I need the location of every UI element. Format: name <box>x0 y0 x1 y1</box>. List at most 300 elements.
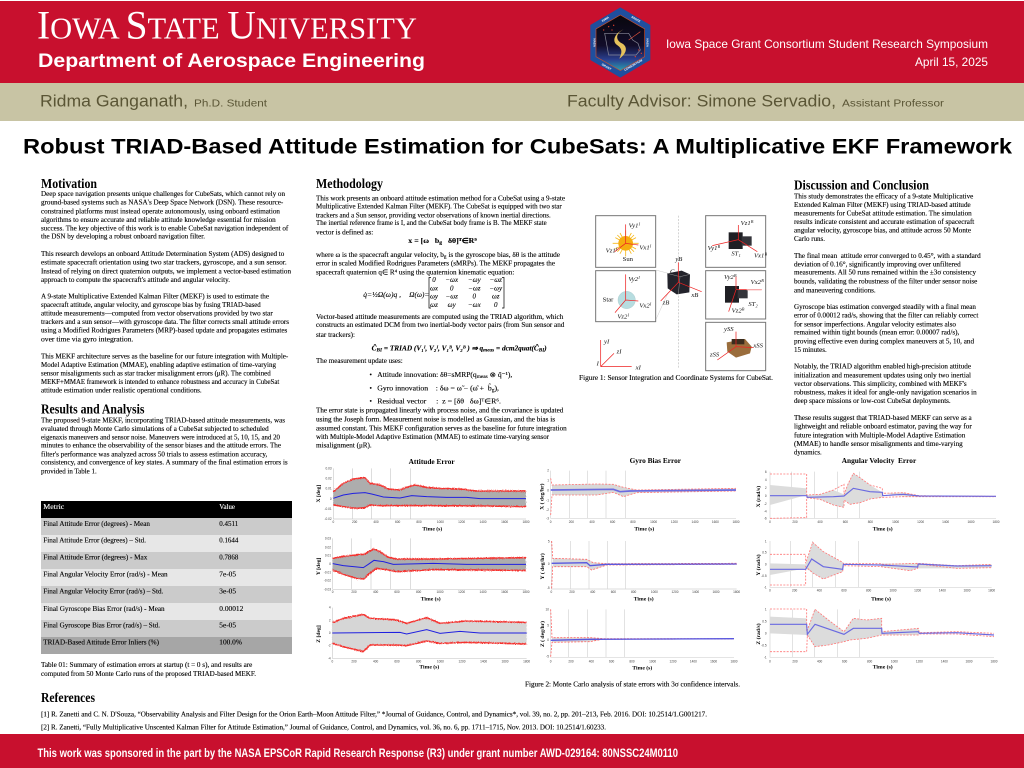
chart: angular velocity X: Time (s) <box>873 526 893 533</box>
results body text: minutes to enhance the observability of the sensor biases and the attitude errors. The <box>41 442 281 450</box>
chart: gyro bias Z: Time (s) <box>632 665 652 672</box>
chart: attitude error X: 1400 <box>479 520 487 524</box>
results summary table: Final Attitude Error (degrees) – Std. <box>43 537 146 545</box>
chart: angular velocity Y: Y (rad/s) <box>755 554 762 576</box>
results summary table: 0.7868 <box>219 554 239 562</box>
symposium date: April 15, 2025 <box>915 55 988 69</box>
panel: star frame: Vz2ᴵ <box>617 313 629 320</box>
results body text: consistency, and convergence of key states. A summary of the final estimation errors is <box>41 459 288 467</box>
state vector explanation: where ω is the spacecraft angular velocity, b <box>316 251 440 259</box>
chart: gyro bias Z: 0 <box>547 638 549 642</box>
chart: angular velocity Y: -0.5 <box>761 574 767 578</box>
icon: cubesat body frame: zB <box>662 299 669 306</box>
chart: angular velocity X: -4 <box>764 509 767 513</box>
chart: angular velocity X: -6 <box>764 517 767 521</box>
chart: attitude error Y: 1800 <box>522 590 530 594</box>
chart: gyro bias Y: Y ( deg/hr) <box>539 553 546 579</box>
chart: angular velocity Z: -0.5 <box>761 644 767 648</box>
chart: gyro bias Z: 1600 <box>710 659 717 663</box>
motivation body text: the DSN by developing a robust onboard navigation filter. <box>41 233 205 241</box>
motivation body text: sensor misalignments such as star tracker misalignment errors (μR). The combined <box>41 369 271 377</box>
chart title: Angular Velocity Error <box>842 456 917 465</box>
chart: attitude error X: 1200 <box>458 520 465 524</box>
motivation body text: attitude measurements—computed from vector observations provided by two star <box>41 309 273 317</box>
motivation body text: estimate spacecraft orientation using two star trackers, gyroscope, and a sun sensor. <box>41 259 287 267</box>
sponsorship acknowledgement: This work was sponsored in the part by the NASA EPSCoR Rapid Research Response (R3) under grant number AWD-029164: 80NSSC24M0110 <box>38 748 678 760</box>
icon: consortium hexagon logo: SPACE <box>630 15 641 23</box>
chart: attitude error X: 1600 <box>501 520 508 524</box>
chart: gyro bias Z: 1000 <box>649 659 656 663</box>
chart: angular velocity Z: -1 <box>764 656 767 660</box>
chart: attitude error Y: 0.01 <box>325 554 331 558</box>
chart: gyro bias Z: 1800 <box>730 659 738 663</box>
discussion body text: Extended Kalman Filter (MEKF) using TRIAD-based attitude <box>794 201 971 209</box>
chart: angular velocity Z: 600 <box>842 659 848 663</box>
chart: gyro bias X: 1 <box>547 479 549 483</box>
discussion body text: The final mean attitude error converged to 0.45°, with a standard <box>794 252 981 260</box>
motivation body text: Instead of relying on direct quaternion outputs, we implement a vector-based estimation <box>41 267 292 275</box>
motivation body text: MEKF+MMAE framework is intended to enhance robustness and accuracy in CubeSat <box>41 378 279 386</box>
results summary table: TRIAD-Based Attitude Error Inliers (%) <box>43 638 160 646</box>
measurement update intro: The measurement update uses: <box>316 357 403 365</box>
heading: motivation: Motivation <box>41 177 97 192</box>
error state paragraph: using the Joseph form. Measurement noise is modelled as Gaussian, and the bias is <box>316 415 555 423</box>
chart: gyro bias X: 0 <box>547 489 549 493</box>
equation: TRIAD: Ĉ <box>372 344 376 352</box>
icon: cubesat body frame: xB <box>690 292 698 299</box>
panel: sun sensor <box>706 322 766 371</box>
panel: sun frame: Vx1ᴵ <box>639 244 652 251</box>
header banner <box>0 1 1024 83</box>
discussion body text: deep space missions or low-cost CubeSat deployments. <box>794 397 951 405</box>
discussion body text: results indicate consistent and accurate estimation of spacecraft <box>794 218 974 226</box>
chart: angular velocity Z: 0 <box>769 659 771 663</box>
chart: attitude error Y: 0.02 <box>325 545 331 549</box>
chart: angular velocity X: 600 <box>843 520 848 524</box>
equation: quaternion kinematics: ωz <box>492 293 500 301</box>
chart: attitude error X: 0.03 <box>326 467 332 471</box>
measurement update bullets: • <box>370 384 372 392</box>
discussion body text: remained within tight bounds (mean error: 0.00007 rad/s), <box>794 329 960 337</box>
measurement update bullets <box>370 371 513 406</box>
chart: angular velocity X: 2 <box>765 486 767 490</box>
university wordmark: IOWA STATE UNIVERSITY <box>37 2 417 48</box>
discussion body text: and maneuvering conditions. <box>794 286 876 294</box>
discussion body text: These results suggest that TRIAD-based MEKF can serve as a <box>794 414 973 422</box>
discussion body text: robustness, makes it ideal for angle-only navigation scenarios in <box>794 388 977 396</box>
chart: attitude error Z: 4 <box>329 606 331 610</box>
chart: attitude error Z: 1800 <box>523 659 530 663</box>
discussion body text: measurements. All 50 runs remained within the ±3σ consistency <box>794 269 976 277</box>
results summary table: Final Attitude Error (degrees) - Max <box>43 554 148 562</box>
chart: attitude error Z: 0 <box>329 631 331 635</box>
motivation body text: using a Modified Rodrigues Parameters (MRP)-based update and propagates estimates <box>41 327 288 335</box>
equation: quaternion kinematics: 0 <box>473 293 477 301</box>
chart: gyro bias Z: 1200 <box>669 659 677 663</box>
chart: angular velocity Y: 1600 <box>963 589 971 593</box>
results summary table: 0.4511 <box>219 520 239 528</box>
results body text: evaluated through Monte Carlo simulations of a CubeSat subjected to scheduled <box>41 425 269 433</box>
chart: attitude error Y: 0 <box>329 562 331 566</box>
chart: angular velocity Y: 0.5 <box>762 551 767 555</box>
chart: angular velocity X: 0 <box>765 494 767 498</box>
panel: methodology <box>316 177 567 450</box>
chart: gyro bias Z: 10 <box>545 607 549 611</box>
chart: gyro bias X: 1200 <box>671 520 678 524</box>
panel: star tracker 2 <box>706 271 766 319</box>
chart: gyro bias Y: 1400 <box>692 590 699 594</box>
icon: cubesat body frame: C <box>670 268 675 275</box>
icon: cubesat body frame <box>661 256 702 306</box>
equation: quaternion kinematics: 0 <box>450 284 454 292</box>
chart: angular velocity Y: 0 <box>765 563 767 567</box>
chart: gyro bias X: 1800 <box>732 520 740 524</box>
chart: attitude error X: -0.02 <box>324 517 332 521</box>
equation: quaternion kinematics: q̇=½Ω(ω)q , <box>363 291 401 299</box>
chart: angular velocity X: 1200 <box>917 520 924 524</box>
icon: consortium hexagon logo: NASA <box>593 38 597 48</box>
chart: attitude error X: 0.02 <box>326 477 332 481</box>
state vector explanation: error in scaled Modified Rodrigues Parameters (sMRPs). The MEKF propagates the <box>316 260 555 268</box>
chart: gyro bias X: -2 <box>546 508 549 512</box>
motivation body text: This MEKF architecture serves as the baseline for our future integration with Multiple- <box>41 353 289 361</box>
discussion body text: future integration with Multiple-Model Adaptive Estimation <box>794 432 966 440</box>
chart: attitude error Y: Y [deg] <box>316 557 322 575</box>
chart: angular velocity Y: 200 <box>792 589 798 593</box>
panel: discussion and conclusion <box>794 178 981 457</box>
motivation body text: algorithms to ensure accurate and reliable attitude knowledge essential for mission <box>41 216 276 224</box>
equation: quaternion kinematics: ωx <box>430 284 439 292</box>
chart: attitude error X: 800 <box>416 520 422 524</box>
measurement update bullets: • <box>370 371 372 379</box>
equation: TRIAD: ) <box>543 344 547 352</box>
results summary table: Final Gyroscope Bias Error (rad/s) – Std. <box>43 622 160 630</box>
symposium name: Iowa Space Grant Consortium Student Research Symposium <box>666 37 988 51</box>
chart: gyro bias Z: -5 <box>546 655 549 659</box>
chart: angular velocity Z <box>755 608 998 671</box>
chart: angular velocity Z: Time (s) <box>873 664 893 671</box>
chart: attitude error X: 1800 <box>522 520 530 524</box>
measurement update bullets: ⊗ q̂⁻¹), <box>488 371 513 379</box>
chart: gyro bias Y: 600 <box>611 590 616 594</box>
panel: star tracker 1: Vy1ᴮ <box>708 245 720 252</box>
heading: references: References <box>41 691 95 706</box>
chart: gyro bias X: 200 <box>569 520 574 524</box>
panel: star tracker 2: Vz2ᴮ <box>732 307 745 314</box>
icon: inertial frame axes: xI <box>635 364 642 371</box>
measurement update bullets: Residual vector : z = [δθ δω]ᵀ∈R⁶. <box>377 398 501 406</box>
chart: attitude error Z: 1200 <box>458 659 466 663</box>
chart: gyro bias Y: Time (s) <box>634 596 654 603</box>
chart group: angular velocity error <box>755 456 1000 671</box>
chart: angular velocity X <box>755 470 1000 533</box>
motivation body text: attitude estimation under realistic operational conditions. <box>41 387 202 395</box>
discussion body text: This study demonstrates the efficacy of a 9-state Multiplicative <box>794 193 973 201</box>
chart: attitude error Y: 200 <box>351 590 357 594</box>
state vector explanation: g <box>444 255 447 260</box>
results summary table <box>41 501 292 654</box>
chart: angular velocity Z: 1000 <box>891 659 898 663</box>
chart: gyro bias Y: 1000 <box>651 590 658 594</box>
chart: attitude error Y: 600 <box>394 590 400 594</box>
results summary table: Metric <box>43 503 64 511</box>
icon: cubesat body frame: yB <box>674 256 682 263</box>
chart: gyro bias X <box>538 469 740 533</box>
chart: angular velocity Y: 600 <box>841 589 847 593</box>
discussion body text: initialization and measurement updates using only two inertial <box>794 371 971 379</box>
reference list: [1] R. Zanetti and C. N. D'Souza, “Observability Analysis and Filter Design for the Orion Earth–Moon Attitude Filter,” *Journal of Guidance, Control, and Dynamics*, vol. 39, no. 2, pp. 201–213, Feb. 2016. DOI: 10.2514/1.G001217. <box>41 710 707 718</box>
discussion body text: (MMAE) to handle sensor misalignments and time-varying <box>794 440 963 448</box>
panel: star tracker 2: Vy2ᴮ <box>724 274 737 281</box>
measurement update bullets: Attitude innovation: δθ=sMRP(q <box>377 371 470 379</box>
discussion body text <box>794 193 981 457</box>
state vector explanation <box>316 251 560 277</box>
chart: angular velocity Y: 1000 <box>889 589 897 593</box>
chart: angular velocity Y: 400 <box>817 589 822 593</box>
chart: angular velocity Z: 200 <box>792 659 798 663</box>
table caption: Table 01: Summary of estimation errors at startup (t = 0 s), and results are <box>41 661 252 669</box>
chart: gyro bias Y <box>539 539 740 603</box>
discussion body text: angular velocity, gyroscope bias, and attitude across 50 Monte <box>794 227 971 235</box>
error state paragraph <box>316 407 567 450</box>
table caption: computed from 50 Monte Carlo runs of the proposed TRIAD-based MEKF. <box>41 670 256 678</box>
discussion body text: error of 0.00012 rad/s, showing that the filter can reliably correct <box>794 312 978 320</box>
chart: gyro bias Y: -5 <box>547 586 550 590</box>
equation: quaternion kinematics: ωy <box>430 293 439 301</box>
equation: TRIAD: BI <box>538 348 545 353</box>
chart: gyro bias X: 1000 <box>650 520 657 524</box>
chart: attitude error Y: 1600 <box>501 590 508 594</box>
chart: attitude error X: 400 <box>373 520 379 524</box>
chart: attitude error Y: -0.03 <box>324 587 331 591</box>
methodology intro text: Multiplicative Extended Kalman Filter (MEKF). The CubeSat is equipped with two star <box>316 202 562 210</box>
chart: gyro bias X: 1600 <box>712 520 719 524</box>
equation: TRIAD: meas <box>483 348 494 353</box>
chart: angular velocity X: 4 <box>765 478 767 482</box>
chart: angular velocity Y: 1800 <box>988 589 995 593</box>
chart: attitude error Y <box>316 537 530 603</box>
discussion body text: measurements for CubeSat attitude estimation. The simulation <box>794 210 972 218</box>
chart: angular velocity X: 6 <box>765 470 767 474</box>
chart: attitude error Z: -4 <box>328 656 331 660</box>
chart: angular velocity X: 1800 <box>992 520 1000 524</box>
results summary table: 3e-05 <box>219 588 237 596</box>
chart: angular velocity Z: 1200 <box>916 659 923 663</box>
heading: results and analysis: Results and Analysis <box>41 402 145 418</box>
error state paragraph: The error state is propagated linearly with process noise, and the covariance is updated <box>316 407 564 415</box>
results summary table: Final Angular Velocity Error (rad/s) – Std. <box>43 588 164 596</box>
panel: sun frame <box>596 216 656 267</box>
heading: methodology: Methodology <box>316 177 383 192</box>
chart: attitude error Y: 0 <box>332 590 334 594</box>
chart: angular velocity X: 800 <box>868 520 873 524</box>
motivation body text: Model Adaptive Estimation (MMAE), enabling adaptive estimation of time-varying <box>41 361 276 369</box>
panel: star tracker 1: ST₁ <box>731 251 741 258</box>
results summary table: Value <box>219 503 235 511</box>
discussion body text: proving effective even during complex maneuvers at 5, 10, and <box>794 337 975 345</box>
footer banner <box>0 734 1024 768</box>
chart: attitude error Z: 2 <box>329 618 331 622</box>
chart: gyro bias X: -3 <box>546 516 549 520</box>
motivation body text: Deep space navigation presents unique challenges for CubeSats, which cannot rely on <box>41 190 285 198</box>
discussion body text: for sensor imperfections. Angular velocity estimates also <box>794 320 956 328</box>
equation: quaternion kinematics: −ωz <box>468 284 481 292</box>
chart: gyro bias Y: 200 <box>569 590 575 594</box>
chart: gyro bias Z: 400 <box>589 659 594 663</box>
results body text: filter's performance was analyzed across 50 trials to assess estimation accuracy, <box>41 450 268 458</box>
results body text: provided in Table 1. <box>41 468 97 476</box>
chart: attitude error Z: Time (s) <box>419 664 439 671</box>
chart: gyro bias Y: 0 <box>550 590 552 594</box>
methodology intro text: trackers and a Sun sensor, providing vector observations of known inertial directions. <box>316 211 551 219</box>
chart: angular velocity Y: 0 <box>769 589 771 593</box>
equation: state vector: x = [ω b <box>408 237 436 245</box>
motivation body text: spacecraft attitude, angular velocity, and gyroscope bias by fusing TRIAD-based <box>41 301 261 309</box>
chart: angular velocity Y: 1 <box>765 539 767 543</box>
panel: star frame: Vx2ᴵ <box>639 302 652 309</box>
icon: consortium hexagon logo: IOWA <box>601 15 611 23</box>
chart: attitude error Y: 400 <box>373 590 379 594</box>
chart: attitude error Y: 800 <box>416 590 422 594</box>
panel: sun frame: Vz1ᴵ <box>606 248 618 255</box>
icon: consortium hexagon logo: NASA <box>646 38 650 48</box>
results body text <box>41 417 288 476</box>
chart: gyro bias X: -1 <box>546 499 549 503</box>
chart: gyro bias X: 600 <box>610 520 616 524</box>
chart: attitude error Y: -0.02 <box>324 579 331 583</box>
chart: angular velocity Y: 1400 <box>939 589 946 593</box>
chart: angular velocity X: X (rad/s) <box>755 486 762 507</box>
heading: discussion and conclusion: Discussion and Conclusion <box>794 178 929 194</box>
motivation body text: over time via gyro integration. <box>41 335 134 343</box>
chart: attitude error X: 200 <box>352 520 358 524</box>
TRIAD explanation: Vector-based attitude measurements are computed using the TRIAD algorithm, which <box>316 313 564 321</box>
student role: Ph.D. Student <box>194 98 267 110</box>
measurement update bullets: • <box>370 398 372 406</box>
panel: star frame <box>596 271 656 322</box>
panel: star tracker 1: Vx1ᴮ <box>754 252 767 259</box>
chart: gyro bias X: Time (s) <box>634 526 654 533</box>
chart: gyro bias X: 400 <box>589 520 595 524</box>
error state paragraph: assumed constant. This MEKF configuration serves as the baseline for future integration <box>316 424 567 432</box>
chart: attitude error X: 0 <box>332 520 334 524</box>
chart: attitude error Z <box>316 606 530 671</box>
results summary table: Final Angular Velocity Error (rad/s) - Mean <box>43 571 168 579</box>
methodology intro text: vector is defined as: <box>316 228 373 236</box>
chart: attitude error X: Time (s) <box>422 526 442 533</box>
chart: angular velocity Z: 1800 <box>990 659 998 663</box>
chart: angular velocity Z: 800 <box>867 659 873 663</box>
results summary table: 5e-05 <box>219 622 237 630</box>
chart: attitude error X: 1000 <box>437 520 444 524</box>
equation: TRIAD: = TRIAD (V₁ᴵ, V₂ᴵ, V₁ᴮ, V₂ᴮ ) ⇒ q <box>382 344 484 352</box>
reference list <box>41 710 707 732</box>
chart title: Gyro Bias Error <box>630 456 682 465</box>
discussion body text: dynamics. <box>794 449 822 457</box>
chart: attitude error Y: -0.01 <box>324 570 331 574</box>
chart: attitude error Z: 1600 <box>501 659 509 663</box>
results summary table: 0.1644 <box>219 537 239 545</box>
department name: Department of Aerospace Engineering <box>38 51 425 72</box>
chart: angular velocity Y: Time (s) <box>871 596 891 603</box>
chart: gyro bias X: 1400 <box>691 520 699 524</box>
results body text: eigenaxis maneuvers and sensor noise. Maneuvers were introduced at 5, 10, 15, and 20 <box>41 433 280 441</box>
chart: attitude error Z: 200 <box>351 659 357 663</box>
chart: gyro bias Z: 800 <box>629 659 635 663</box>
chart: angular velocity Y <box>755 539 995 603</box>
chart: attitude error Z: 1400 <box>480 659 487 663</box>
chart: gyro bias Z: 5 <box>547 623 549 627</box>
discussion body text: bounds, validating the robustness of the filter under sensor noise <box>794 278 977 286</box>
equation: quaternion kinematics: Ω(ω)= <box>409 291 430 299</box>
chart: attitude error X: 0.01 <box>326 487 332 491</box>
results body text: The proposed 9-state MEKF, incorporating TRIAD-based attitude measurements, was <box>41 417 285 425</box>
motivation body text: This research develops an onboard Attitude Determination System (ADS) designed to <box>41 250 285 258</box>
chart: angular velocity X: -2 <box>764 502 767 506</box>
results summary table: 0.00012 <box>219 605 244 613</box>
icon: consortium hexagon logo: CONSORTIUM <box>623 58 643 72</box>
chart: angular velocity Z: 0 <box>765 632 767 636</box>
chart: attitude error Y: 1400 <box>479 590 487 594</box>
chart: attitude error Y: Time (s) <box>421 596 441 603</box>
chart group: gyro bias error <box>538 456 740 672</box>
icon: inertial frame axes: I <box>596 361 600 368</box>
chart: gyro bias X: 0 <box>550 520 552 524</box>
chart: angular velocity Z: Z (rad/s) <box>755 623 762 645</box>
chart: attitude error Y: 0.03 <box>325 537 331 541</box>
icon: inertial frame axes: yI <box>603 338 610 345</box>
TRIAD explanation: star trackers): <box>316 331 355 339</box>
chart: angular velocity Z: 1400 <box>941 659 948 663</box>
results summary table: 7e-05 <box>219 571 237 579</box>
chart: gyro bias X: X ( deg/hr) <box>538 483 545 510</box>
motivation body text <box>41 190 292 395</box>
panel: sun sensor: ySS <box>723 326 734 333</box>
error state paragraph: with Multiple-Model Adaptive Estimation (MMAE) to estimate time-varying sensor <box>316 433 550 441</box>
chart: gyro bias Y: 800 <box>631 590 637 594</box>
panel: star tracker 1 <box>706 216 767 267</box>
chart: attitude error X <box>316 467 530 533</box>
chart: attitude error X: 600 <box>395 520 401 524</box>
chart: attitude error Y: 1200 <box>458 590 465 594</box>
equation: state vector: δθ]ᵀ∈R⁹ <box>442 237 477 245</box>
icon: inertial frame axes <box>596 338 642 371</box>
chart: attitude error X: 0 <box>330 497 332 501</box>
faculty advisor name: Faculty Advisor: Simone Servadio, <box>567 92 836 111</box>
panel: star tracker 2: Vx2ᴮ <box>751 279 764 286</box>
chart: attitude error X: -0.01 <box>324 507 332 511</box>
chart: angular velocity Z: 0.5 <box>762 620 767 624</box>
chart group: attitude error <box>316 457 530 671</box>
results summary table: 100.0% <box>219 638 242 646</box>
panel: sun frame: Vy1ᴵ <box>629 222 640 229</box>
TRIAD explanation <box>316 313 565 339</box>
discussion body text: vector observations. This simplicity, combined with MEKF's <box>794 380 967 388</box>
panel: star tracker 1: Vz1ᴮ <box>741 220 754 227</box>
equation: quaternion kinematics: ωy <box>448 301 457 309</box>
chart: gyro bias Z: 0 <box>550 659 552 663</box>
discussion body text: 15 minutes. <box>794 346 827 354</box>
icon: consortium hexagon logo <box>590 7 650 78</box>
chart: attitude error Z: 1000 <box>437 659 444 663</box>
chart title: Attitude Error <box>409 457 455 466</box>
methodology intro text: This work presents an onboard attitude estimation method for a CubeSat using a 9-state <box>316 195 565 203</box>
chart: gyro bias Y: 1800 <box>733 590 740 594</box>
chart: gyro bias Z <box>539 607 738 672</box>
chart: angular velocity X: 1000 <box>892 520 899 524</box>
measurement update bullets: ), <box>494 384 499 392</box>
panel: sun frame: Sun <box>623 256 634 263</box>
